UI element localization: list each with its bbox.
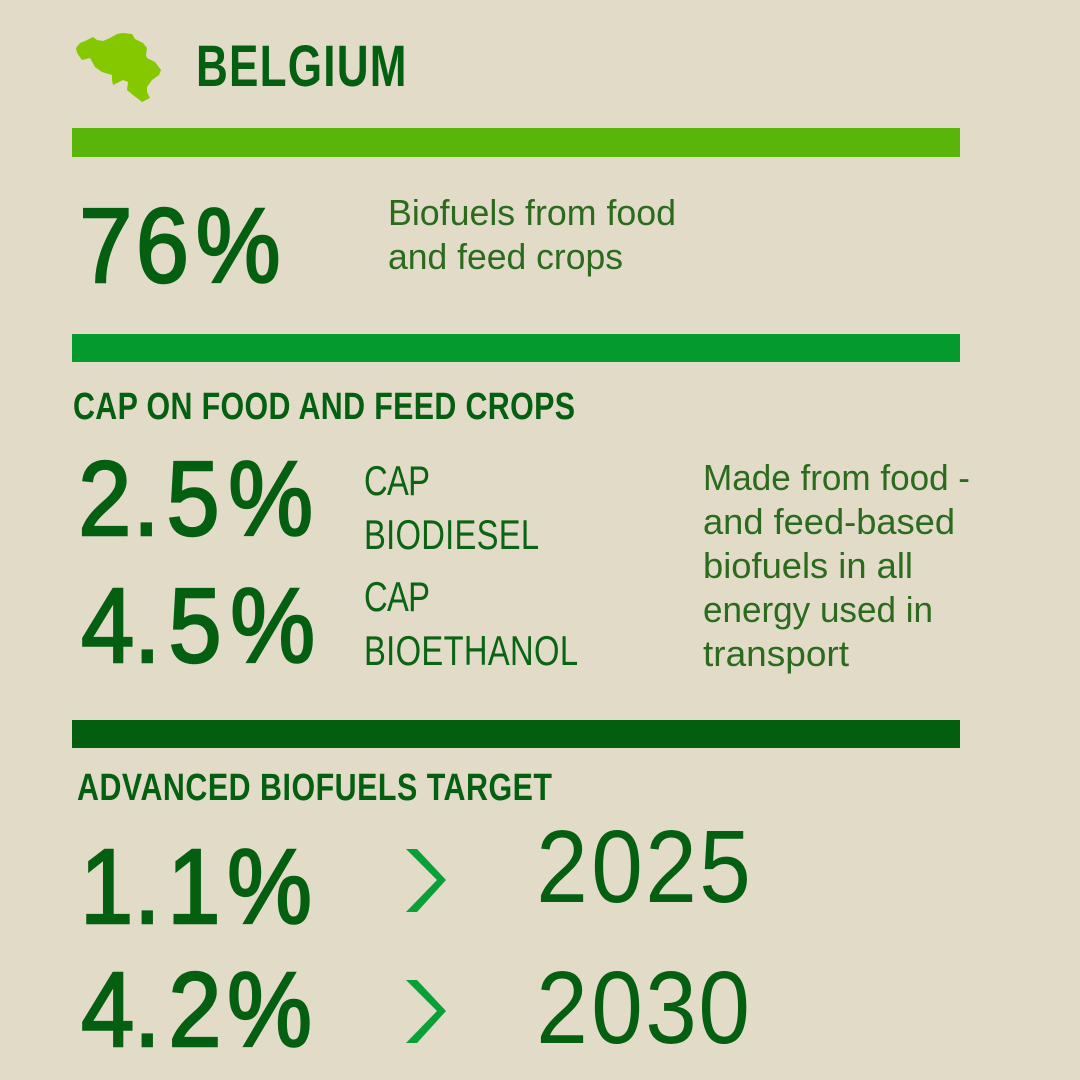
arrow: to 2025 [406, 849, 446, 912]
divider bar: mid green [72, 334, 960, 362]
text block: made from food and feed based biofuels: Made from food - [703, 457, 970, 498]
icon: map of Belgium [76, 33, 161, 102]
label: cap bioethanol: CAP [364, 573, 430, 620]
year: 2025: 2025 [536, 808, 751, 924]
text block: made from food and feed based biofuels: energy used in [703, 589, 933, 630]
heading: cap on food and feed crops: CAP ON FOOD AND FEED CROPS [73, 386, 575, 428]
year: 2030: 2030 [536, 949, 750, 1065]
label: cap bioethanol [364, 573, 578, 674]
label: cap biodiesel: BIODIESEL [364, 511, 539, 558]
label: cap biodiesel [364, 457, 539, 558]
divider bar: light green [72, 128, 960, 157]
divider bar: dark green [72, 720, 960, 748]
text block: made from food and feed based biofuels [703, 457, 970, 674]
stat: 1.1%: 1.1% [80, 828, 312, 946]
text block: made from food and feed based biofuels: biofuels in all [703, 545, 913, 586]
text block: biofuels from food and feed crops: and feed crops [388, 236, 623, 277]
text block: biofuels from food and feed crops: Biofuels from food [388, 192, 676, 233]
label: cap biodiesel: CAP [364, 457, 430, 504]
label: cap bioethanol: BIOETHANOL [364, 627, 578, 674]
stat: 76%: 76% [79, 187, 281, 305]
stat: 4.5%: 4.5% [81, 567, 315, 685]
text block: made from food and feed based biofuels: transport [703, 633, 849, 674]
stat: 4.2%: 4.2% [81, 951, 312, 1069]
stat: 2.5%: 2.5% [78, 440, 313, 558]
text block: made from food and feed based biofuels: and feed-based [703, 501, 955, 542]
arrow: to 2030 [406, 980, 446, 1043]
heading: advanced biofuels target: ADVANCED BIOFUELS TARGET [77, 767, 552, 809]
text block: biofuels from food and feed crops [388, 192, 676, 277]
title: BELGIUM [196, 33, 407, 98]
